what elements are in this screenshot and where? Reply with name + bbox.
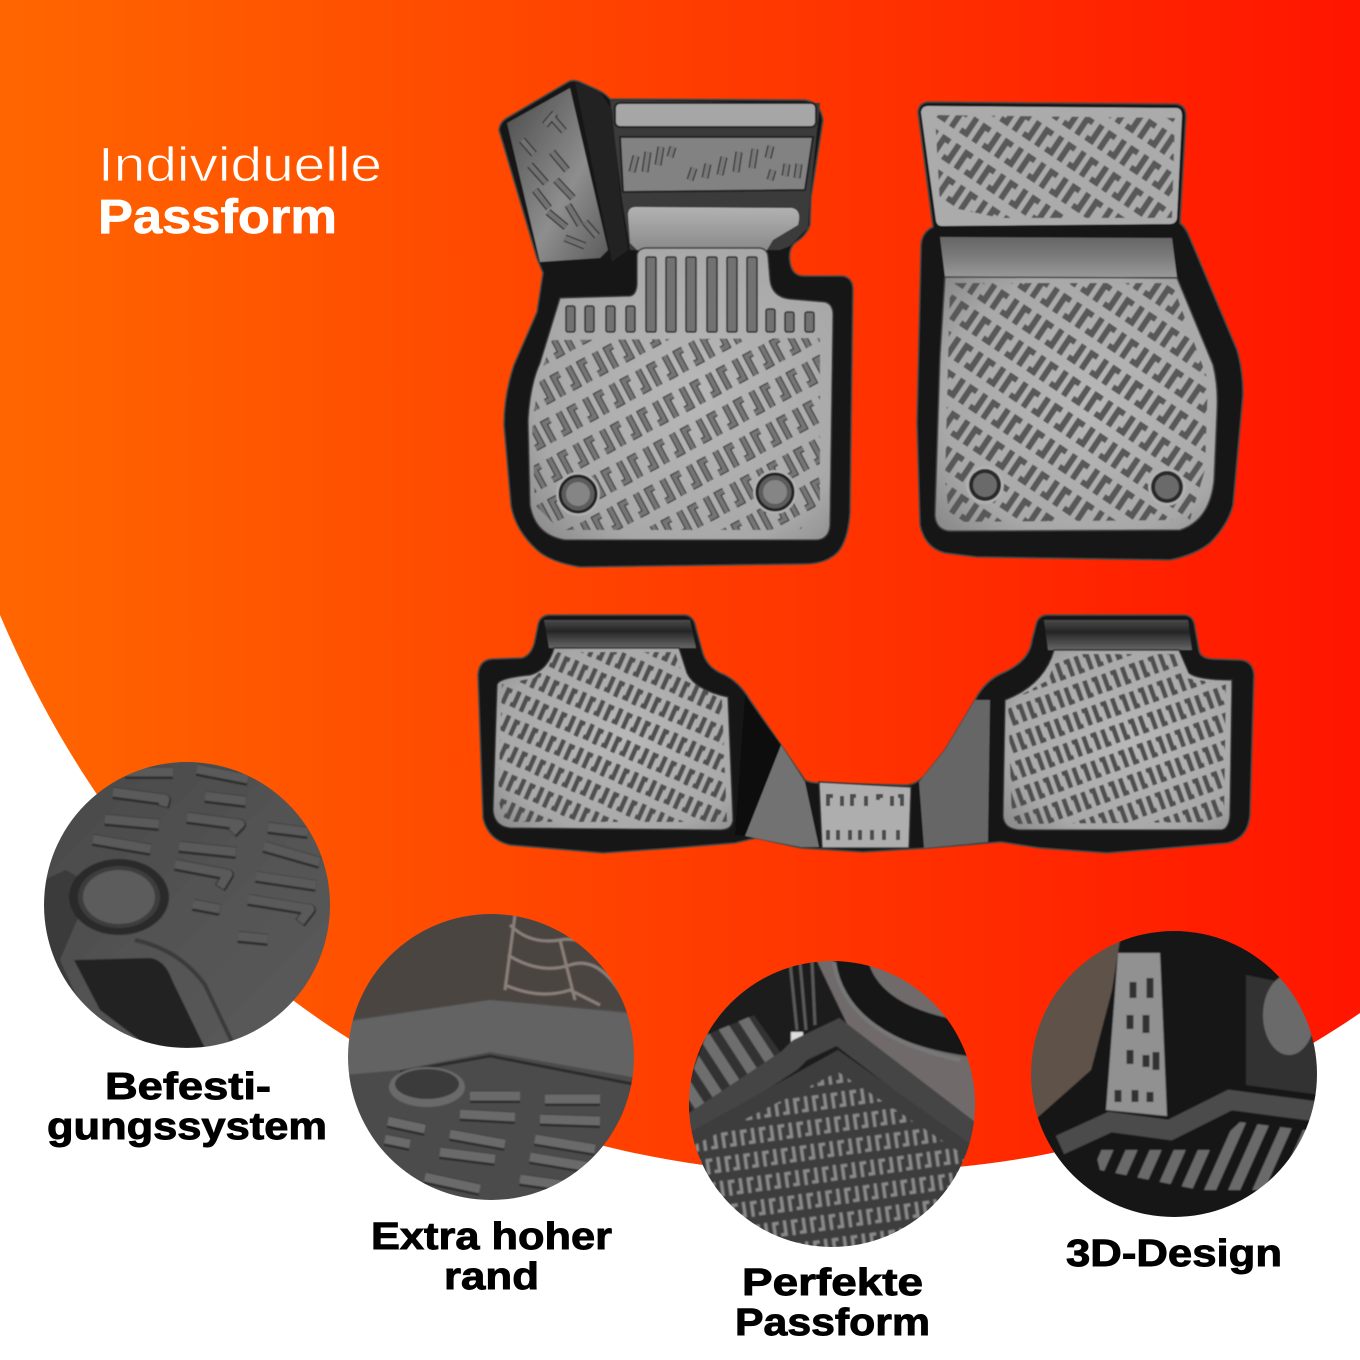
- right tread: [1008, 654, 1226, 824]
- stripes: [689, 1016, 774, 1110]
- photo circle: extra high edge: [344, 910, 638, 1204]
- left ridge: [44, 870, 78, 996]
- fastener: [389, 1067, 465, 1107]
- foot rest panel: [921, 106, 1182, 226]
- front right floor mat: [917, 102, 1243, 560]
- label: Extra hoher rand: [371, 1216, 612, 1298]
- floor tread: [695, 1072, 965, 1247]
- tread pattern: [532, 338, 820, 530]
- tunnel left shadow: [735, 695, 781, 836]
- fastener left: [556, 472, 600, 516]
- metal fitting: [790, 1030, 804, 1043]
- fastener left: [966, 466, 1004, 504]
- front left floor mat: [499, 80, 853, 567]
- toe panel: [620, 137, 813, 192]
- heading: [98, 139, 382, 244]
- floor: [685, 1050, 979, 1251]
- stripes base: [689, 1015, 780, 1110]
- label: Extra hoher rand: Extra hoher: [371, 1216, 612, 1258]
- wall: [1031, 942, 1121, 1118]
- label: Befestigungssystem: [47, 1066, 327, 1148]
- floor tread: [945, 283, 1208, 522]
- shift rod: [790, 962, 815, 1030]
- fastener: [69, 859, 169, 935]
- ridge: [685, 1032, 979, 1140]
- label: Befestigungssystem: Befesti-: [105, 1066, 271, 1108]
- slanted stripes: [1095, 1122, 1321, 1190]
- step area: [940, 237, 1177, 277]
- side panel: [1106, 953, 1167, 1116]
- label: Befestigungssystem: gungssystem: [47, 1106, 327, 1148]
- label: Extra hoher rand: rand: [444, 1256, 539, 1298]
- right side panel: [1246, 975, 1321, 1095]
- cargo net: [505, 915, 625, 1005]
- label: Perfekte Passform: [735, 1262, 930, 1344]
- tube highlight: [834, 962, 960, 1060]
- floor ridge: [1060, 1100, 1321, 1145]
- pedal side flap: [507, 88, 608, 262]
- left floor: [493, 648, 733, 830]
- toe section base: [610, 100, 820, 250]
- foot rest tread: [935, 115, 1175, 218]
- raised tread blocks: [93, 769, 320, 940]
- drainage slots: [566, 257, 814, 332]
- photo circle: 3D design: [1027, 927, 1321, 1221]
- photo circle: perfect fit: [685, 957, 979, 1251]
- right step area: [1044, 620, 1192, 650]
- photo circle: fastening system: [40, 758, 334, 1052]
- black tube: [850, 957, 975, 1040]
- edge line: [400, 1056, 638, 1085]
- mat outline: [917, 102, 1243, 560]
- mat outline: [478, 615, 1254, 853]
- main floor: [528, 248, 833, 540]
- heading line: Individuelle: Individuelle: [98, 139, 382, 192]
- recessed dark corner: [74, 958, 205, 1048]
- dark column beside flap: [575, 82, 628, 262]
- centre plate: [819, 782, 911, 848]
- tunnel right side: [919, 700, 990, 848]
- tunnel left side: [745, 745, 819, 847]
- left step area: [544, 620, 696, 648]
- right floor: [1003, 650, 1232, 830]
- label: Perfekte Passform: Passform: [735, 1302, 930, 1344]
- label: Perfekte Passform: Perfekte: [742, 1262, 923, 1304]
- floor tread: [385, 1096, 600, 1190]
- carpet: [354, 914, 626, 1018]
- left tread: [498, 652, 727, 822]
- carpet: [816, 961, 975, 1122]
- pedal: [1263, 975, 1315, 1055]
- main floor: [935, 277, 1217, 531]
- step area: [628, 207, 799, 250]
- heel bar: [615, 103, 816, 127]
- heading line: Passform: Passform: [98, 191, 337, 244]
- rear floor mat: [478, 615, 1254, 853]
- raised lip band: [135, 940, 235, 1048]
- mat outline: [499, 80, 853, 567]
- fastener right: [753, 470, 797, 514]
- label: 3D-Design: 3D-Design: [1066, 1233, 1282, 1275]
- raised edge: [344, 1000, 638, 1078]
- fastener right: [1148, 468, 1186, 506]
